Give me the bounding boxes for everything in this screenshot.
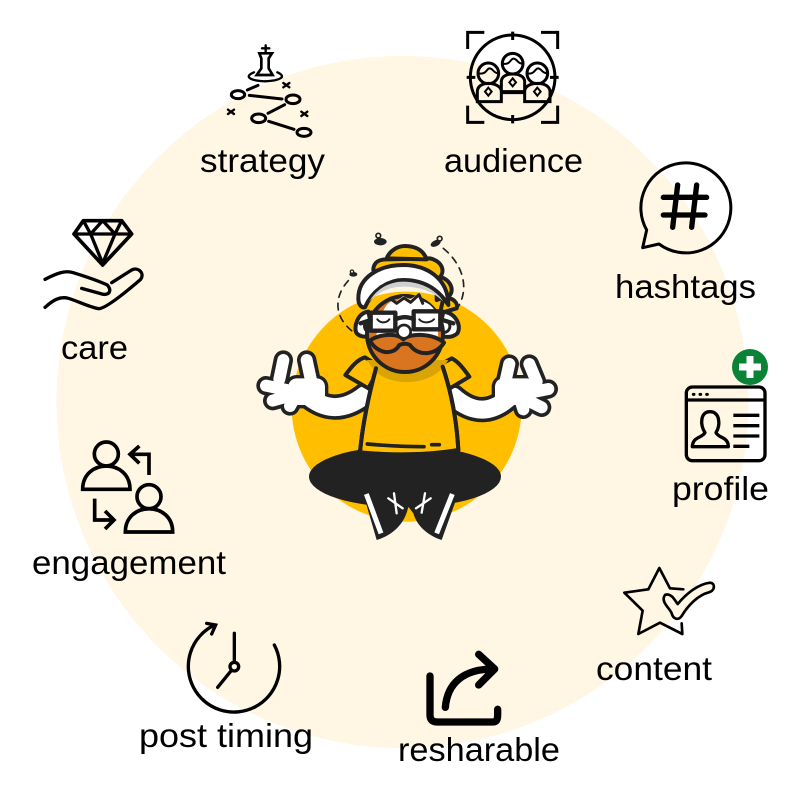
yellow sun circle — [292, 292, 522, 522]
icon: green plus badge — [732, 349, 768, 385]
content item — [596, 568, 714, 687]
glasses — [361, 311, 453, 331]
label: audience: audience — [444, 142, 583, 179]
label: post timing: post timing — [139, 717, 313, 754]
resharable item — [398, 654, 560, 768]
icon: star with check — [624, 568, 714, 634]
icon: diamond over hand — [45, 221, 142, 309]
icon: two people exchange — [83, 442, 173, 532]
hat layers — [373, 246, 457, 313]
label: resharable: resharable — [398, 731, 560, 768]
label: strategy: strategy — [200, 142, 326, 179]
audience item — [444, 32, 583, 179]
arms and hands outline — [266, 360, 548, 409]
icon: chess king and plan — [228, 45, 311, 136]
closed eyes — [377, 319, 434, 322]
profile item — [672, 349, 769, 507]
icon: hashtag speech bubble — [641, 163, 731, 253]
label: hashtags: hashtags — [615, 268, 756, 305]
background circle — [56, 56, 748, 748]
engagement item — [32, 442, 226, 581]
ears — [355, 312, 459, 337]
label: care: care — [61, 329, 128, 366]
legs — [309, 446, 501, 507]
white hat band — [358, 265, 448, 307]
icon: audience in target — [467, 32, 559, 123]
icon: share arrow — [430, 654, 498, 722]
label: content: content — [596, 650, 712, 687]
arms and hands fill — [266, 360, 548, 409]
label: profile: profile — [672, 470, 769, 507]
care item — [45, 221, 142, 366]
shirt — [345, 357, 469, 454]
face — [367, 296, 443, 372]
post timing item — [139, 623, 313, 754]
moustache — [370, 335, 444, 353]
flies — [349, 233, 442, 277]
label: engagement: engagement — [32, 544, 226, 581]
icon: clock with arrow — [188, 623, 280, 712]
strategy item — [200, 45, 326, 179]
icon: profile window — [686, 387, 765, 461]
feet — [363, 493, 458, 540]
trouser stripes and stitches — [366, 494, 452, 533]
hashtags item — [615, 163, 756, 305]
nose — [397, 325, 411, 338]
dashed orbit lines — [338, 248, 464, 333]
central illustration: meditating man — [266, 233, 548, 540]
